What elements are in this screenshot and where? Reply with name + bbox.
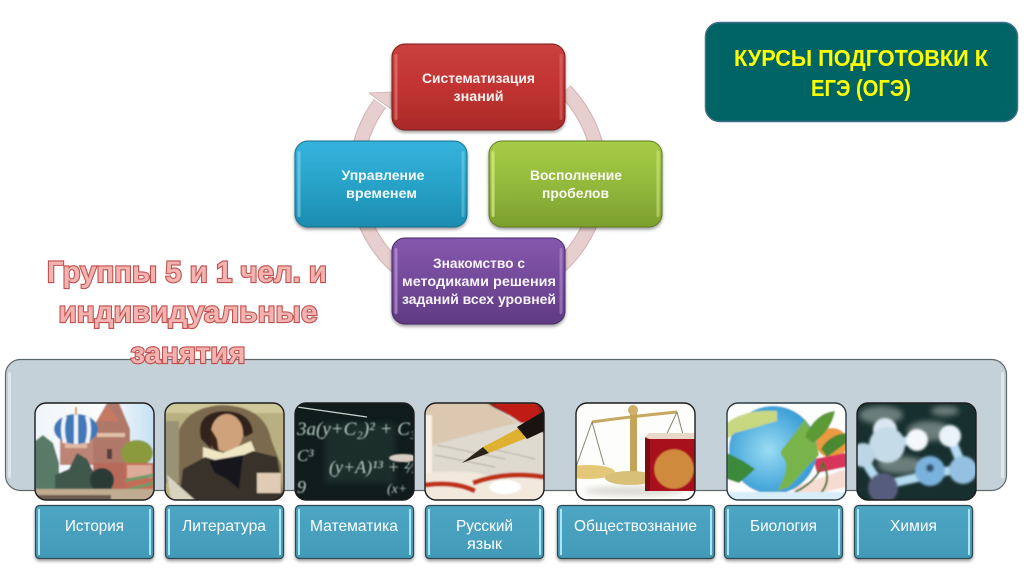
label: mathematics — [296, 506, 414, 558]
node: methods: заданий всех уровней — [402, 291, 556, 307]
arrow: circular cycle ring — [356, 90, 600, 298]
node: time management: временем — [346, 185, 417, 201]
node: filling gaps: пробелов — [542, 185, 609, 201]
label: social studies — [558, 506, 714, 558]
node: time management: Управление — [342, 167, 425, 183]
title box: courses: КУРСЫ ПОДГОТОВКИ К — [734, 45, 989, 71]
label: mathematics: Математика — [310, 518, 398, 535]
label: russian language: Русский — [456, 518, 513, 535]
node: knowledge systematisation: знаний — [454, 88, 504, 104]
label: history: История — [65, 518, 124, 535]
label: literature: Литература — [182, 518, 266, 535]
image: mathematics, blackboard with formulas: 3a(y+C₂)² + C₃y — [296, 419, 425, 440]
label: russian language — [426, 506, 544, 558]
image: mathematics, blackboard with formulas: (y+A)¹³ + ⅔ — [329, 457, 418, 478]
heading: groups: Группы 5 и 1 чел. и — [47, 256, 327, 289]
title box: courses — [706, 22, 1018, 122]
image: mathematics, blackboard with formulas: 9 — [297, 477, 306, 497]
image: literature, Pushkin portrait — [165, 403, 284, 500]
heading: groups: занятия — [130, 337, 246, 370]
node: filling gaps: Восполнение — [530, 167, 622, 183]
label: chemistry: Химия — [890, 518, 937, 535]
label: russian language: язык — [467, 536, 503, 553]
node: knowledge systematisation: Систематизация — [422, 70, 535, 86]
label: biology: Биология — [750, 518, 817, 535]
image: mathematics, blackboard with formulas: (x+ — [387, 482, 407, 497]
image: russian language, fountain pen on paper — [425, 403, 544, 500]
image: mathematics, blackboard with formulas — [295, 403, 425, 500]
label: chemistry — [854, 506, 972, 558]
label: biology — [724, 506, 842, 558]
node: filling gaps — [489, 141, 662, 227]
image: chemistry, molecule — [851, 403, 977, 503]
heading: groups — [47, 256, 327, 370]
label: social studies: Обществознание — [574, 518, 697, 535]
node: methods — [392, 238, 565, 324]
cycle diagram — [295, 44, 662, 324]
node: time management — [295, 141, 467, 227]
node: methods: Знакомство с — [433, 255, 525, 271]
node: knowledge systematisation — [392, 44, 565, 130]
panel: subjects background — [6, 360, 1006, 490]
image: biology, globe and leaves — [727, 403, 848, 500]
label: literature — [166, 506, 284, 558]
image: mathematics, blackboard with formulas: C³ — [297, 446, 314, 465]
image: history, Saint Basil's Cathedral — [35, 403, 154, 500]
title box: courses: ЕГЭ (ОГЭ) — [811, 75, 911, 101]
image: social studies, scales and red book — [561, 403, 695, 500]
node: methods: методиками решения — [402, 273, 556, 289]
heading: groups: индивидуальные — [58, 296, 318, 329]
label: history — [36, 506, 154, 558]
